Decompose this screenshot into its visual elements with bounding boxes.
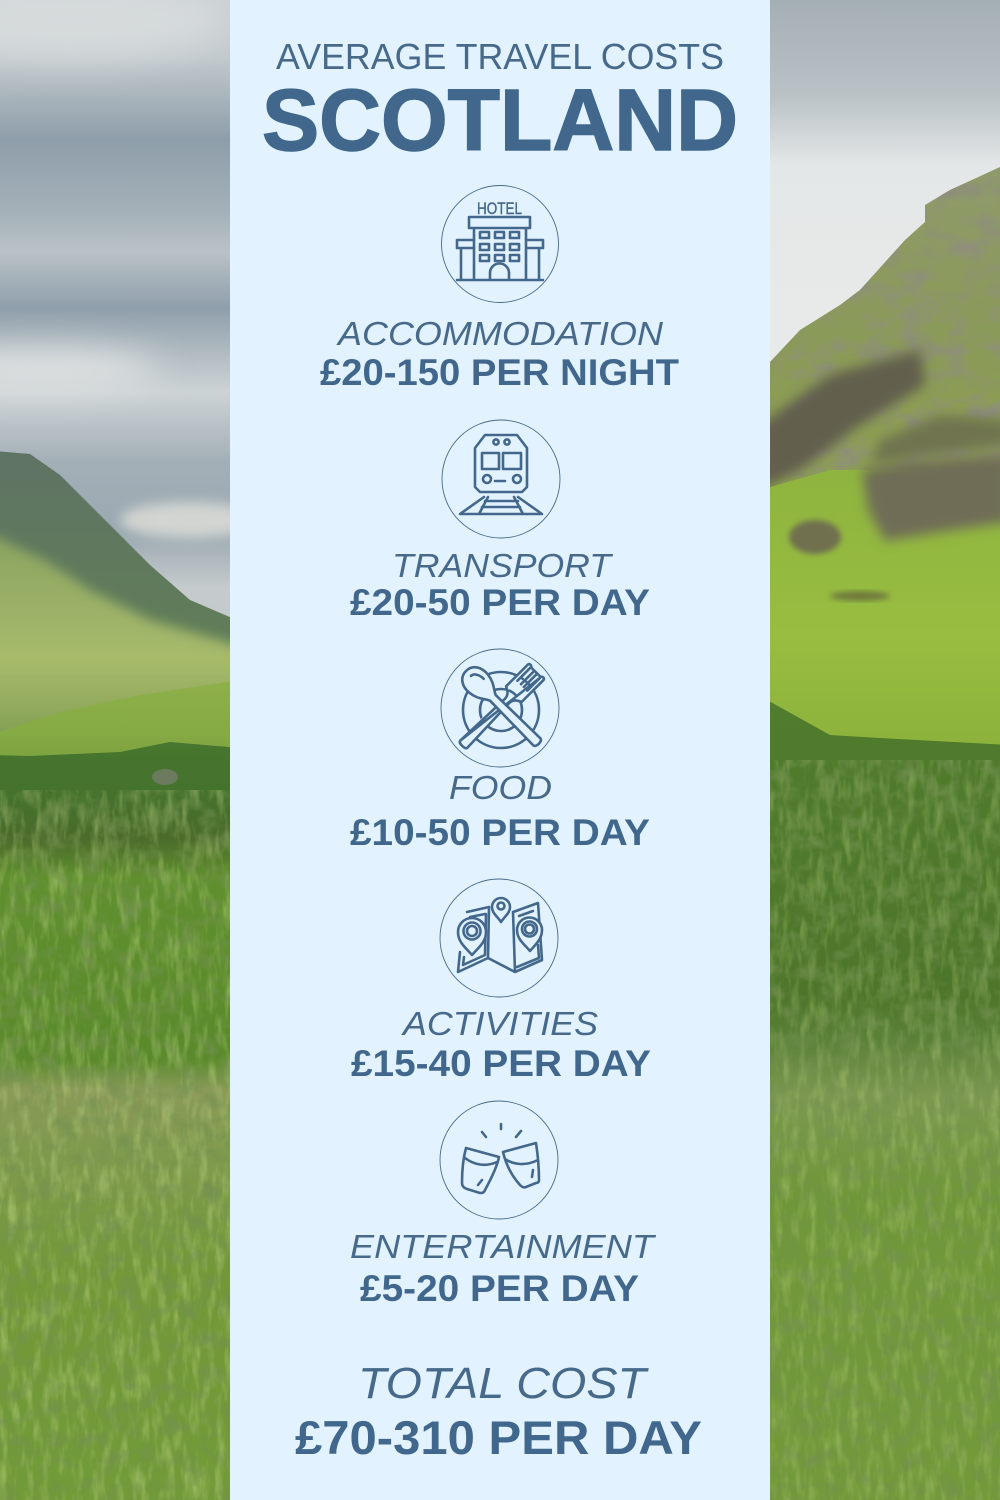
value: entertainment cost: £5-20 PER DAY [360,1268,639,1309]
label: entertainment: ENTERTAINMENT [350,1228,657,1265]
label: food: FOOD [449,769,552,806]
background photo: right side [760,0,1000,1500]
icon: map with pins [440,879,558,997]
background photo: left side [0,0,230,1500]
value: transport cost: £20-50 PER DAY [350,582,650,623]
label: total cost: TOTAL COST [358,1359,649,1408]
label: accommodation: ACCOMMODATION [336,315,663,352]
value: activities cost: £15-40 PER DAY [351,1043,651,1084]
value: total cost: £70-310 PER DAY [295,1411,702,1464]
title: Scotland: SCOTLAND [262,72,738,169]
icon: train [442,420,560,538]
heading: average travel costs: AVERAGE TRAVEL COSTS [276,36,724,77]
central panel [230,0,770,1500]
icon: hotel: HOTEL [477,200,522,218]
label: activities: ACTIVITIES [401,1005,598,1042]
icon: clinking glasses [440,1101,558,1219]
label: transport: TRANSPORT [392,547,614,584]
value: accommodation cost: £20-150 PER NIGHT [320,352,679,393]
icon: hotel [442,186,558,302]
icon: food [441,649,559,767]
value: food cost: £10-50 PER DAY [350,812,650,853]
